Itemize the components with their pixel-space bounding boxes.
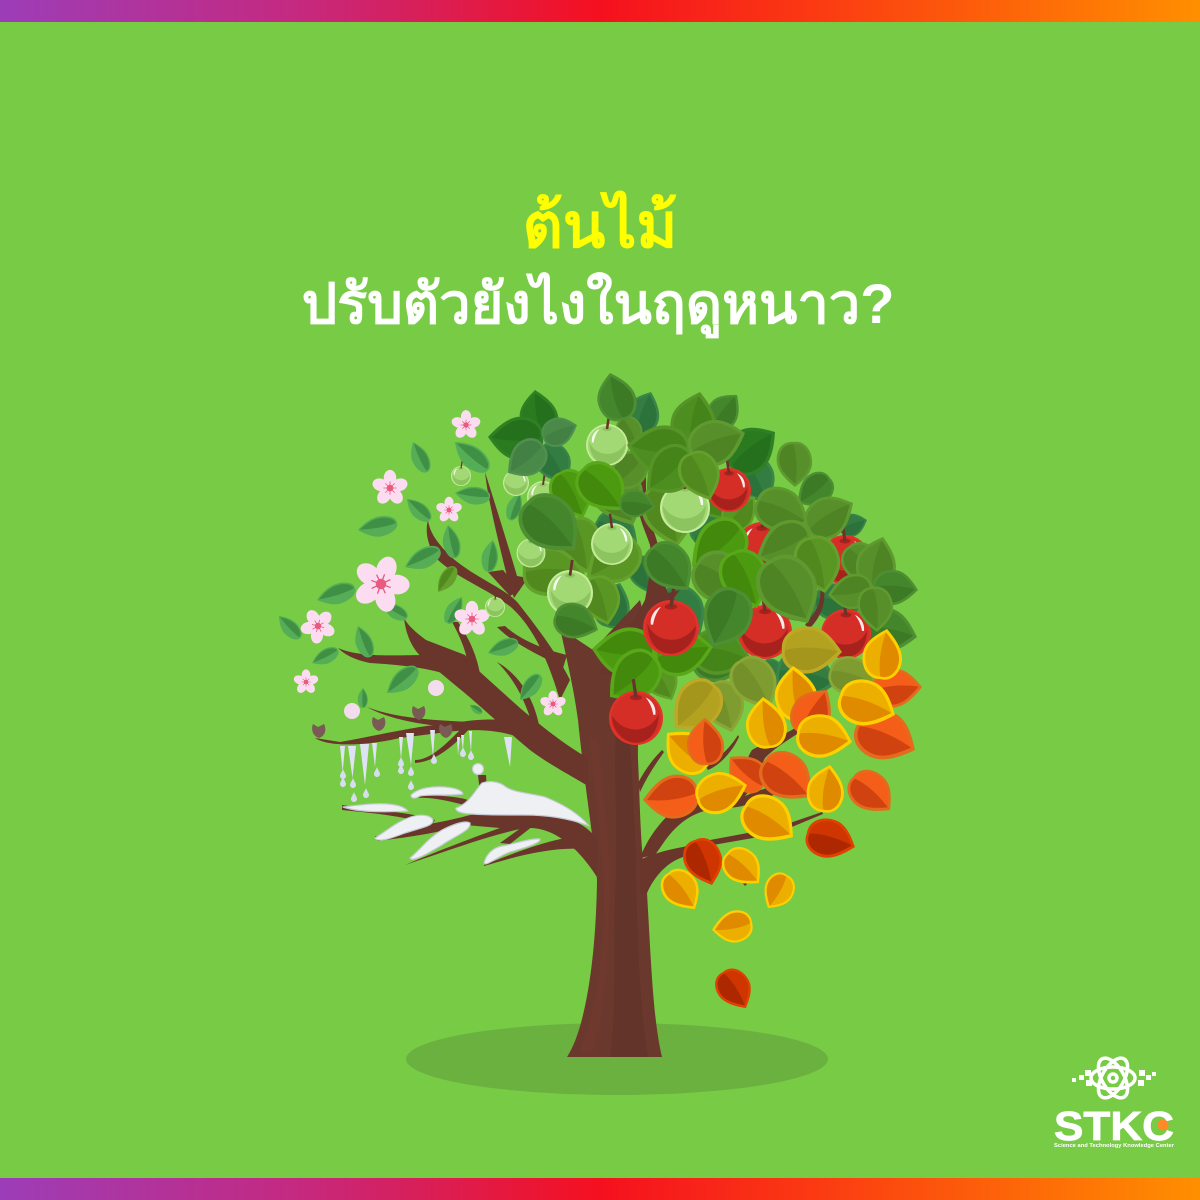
logo wordmark: STKC: [1054, 1103, 1174, 1149]
left branches: [315, 472, 597, 877]
spring leaves: [273, 434, 547, 716]
top gradient bar: [0, 0, 1200, 22]
flowers and buds: [293, 410, 567, 738]
bottom gradient bar: [0, 1178, 1200, 1200]
logo orange dot: [1158, 1120, 1168, 1130]
cluster: dark star: [488, 387, 582, 491]
title line 1: ต้นไม้: [523, 190, 677, 261]
front foliage: leaf clusters: [488, 368, 919, 658]
olive turning leaves: [659, 626, 883, 744]
tree trunk: [560, 600, 662, 1057]
ground shadow: [406, 1023, 828, 1095]
title: [302, 190, 894, 339]
apples: [451, 415, 871, 745]
back foliage: dark leaves: [588, 385, 921, 706]
logo pixel squares: [1072, 1070, 1156, 1086]
right branches: [600, 473, 824, 893]
icicles and drops: [340, 730, 512, 802]
autumn leaves: [640, 626, 925, 1017]
STKC logo: [1054, 1053, 1175, 1149]
logo atom icon: [1091, 1053, 1135, 1103]
mid foliage: green leaves: [522, 412, 766, 715]
logo tagline: Science and Technology Knowledge Center: [1054, 1143, 1175, 1149]
title line 2: ปรับตัวยังไงในฤดูหนาว?: [302, 271, 894, 339]
snow on branches: [343, 764, 589, 864]
